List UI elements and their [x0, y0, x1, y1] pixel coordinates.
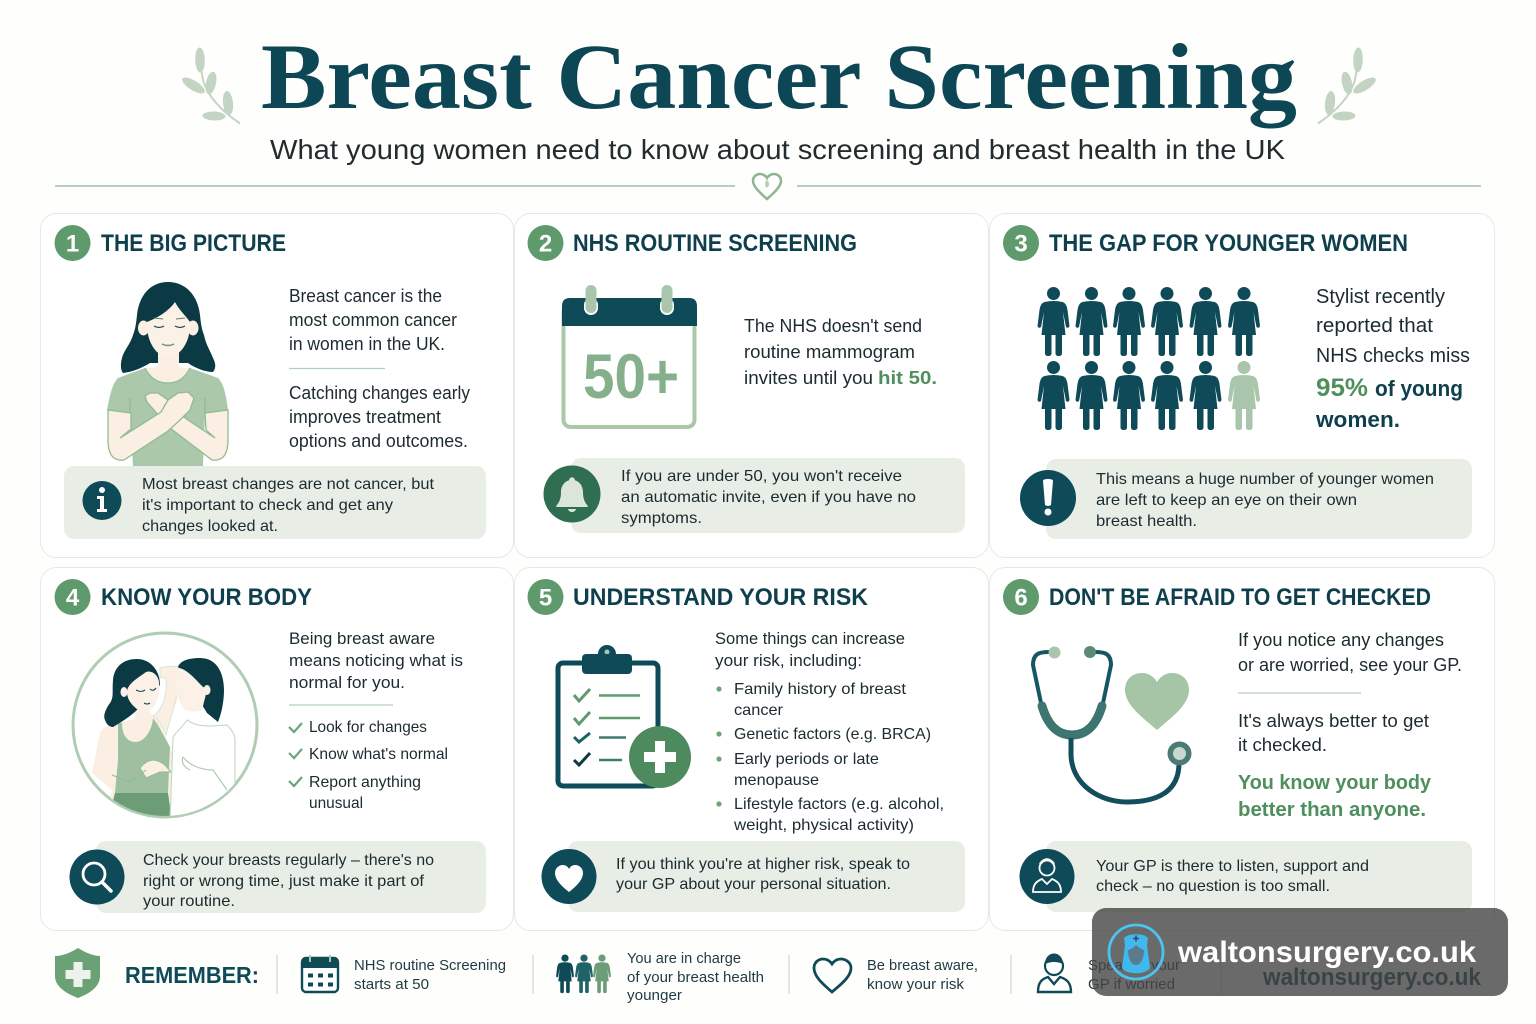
body text: most common cancer — [289, 310, 457, 330]
body text: means noticing what is — [289, 651, 463, 670]
icon: stethoscope and heart — [1033, 646, 1192, 802]
icon: three women — [556, 954, 611, 993]
callout text: your routine. — [143, 893, 235, 910]
icon: magnifier — [70, 850, 124, 904]
title: Breast Cancer Screening — [261, 26, 1297, 129]
reminder text: be aware: Be breast aware, — [867, 957, 978, 974]
callout text — [142, 476, 435, 535]
watermark text: waltonsurgery.co.uk — [1177, 936, 1476, 969]
checklist: Look for changes — [309, 719, 427, 736]
callout text — [1096, 858, 1369, 895]
callout text: your GP about your personal situation. — [616, 876, 891, 893]
checklist: unusual — [309, 795, 363, 812]
icon: shield — [55, 948, 100, 998]
icon: doctor — [1020, 849, 1074, 904]
body text: NHS checks miss — [1316, 345, 1470, 367]
body text: normal for you. — [289, 673, 405, 692]
subtitle: What young women need to know about screening and breast health in the UK — [270, 134, 1285, 165]
heading: UNDERSTAND YOUR RISK — [573, 584, 869, 611]
heading: KNOW YOUR BODY — [101, 584, 312, 611]
icon: heart outline — [814, 959, 851, 992]
number badge 2: 2 — [539, 230, 552, 258]
callout text: Most breast changes are not cancer, but — [142, 476, 435, 493]
body text — [1315, 286, 1470, 432]
number badge 5: 5 — [539, 584, 552, 612]
callout text: changes looked at. — [142, 518, 278, 535]
callout — [544, 458, 965, 533]
body text: routine mammogram — [744, 342, 915, 362]
reminder text: be aware: know your risk — [867, 976, 965, 993]
website: waltonsurgery.co.uk — [1262, 964, 1482, 991]
risk factors text: Lifestyle factors (e.g. alcohol, — [734, 796, 944, 813]
callout text: Check your breasts regularly – there's no — [143, 852, 434, 869]
body text — [289, 286, 470, 451]
icon: heart — [542, 849, 596, 904]
body text: The NHS doesn't send — [744, 316, 922, 336]
reminder text: in charge: You are in charge — [627, 950, 741, 967]
risk factors text: your risk, including: — [715, 652, 862, 670]
body text: options and outcomes. — [289, 431, 468, 451]
panel: know your body — [40, 568, 514, 930]
body text: invites until you — [744, 368, 873, 388]
pictogram: 11 of 12 women — [1038, 287, 1260, 430]
checklist: Know what's normal — [309, 746, 448, 763]
body text — [1238, 630, 1462, 821]
body text: 95% — [1316, 374, 1368, 402]
callout — [1020, 459, 1472, 539]
icon: small calendar — [302, 955, 338, 992]
number badge 6: 6 — [1014, 584, 1028, 612]
number badge 4 — [54, 579, 90, 615]
callout text: breast health. — [1096, 513, 1197, 530]
callout text: an automatic invite, even if you have no — [621, 489, 916, 506]
reminder text: GP: Speak to your — [1088, 957, 1180, 974]
checklist — [289, 719, 448, 812]
panel: the big picture — [40, 214, 514, 558]
body text: Breast cancer is the — [289, 286, 442, 306]
reminder text: NHS: NHS routine Screening — [354, 957, 506, 974]
risk factors text: Family history of breast — [734, 681, 907, 698]
icon: info — [82, 481, 122, 520]
number badge 3 — [1003, 225, 1039, 261]
callout — [1020, 841, 1472, 912]
icon: clipboard with plus — [558, 645, 691, 788]
reminder text: in charge: of your breast health — [627, 969, 764, 986]
reminder text: GP — [1088, 957, 1180, 993]
watermark overlay — [1092, 908, 1508, 996]
body text — [289, 629, 463, 705]
number badge 1: 1 — [66, 230, 79, 258]
body text: If you notice any changes — [1238, 630, 1444, 650]
callout — [64, 466, 486, 539]
body text: Stylist recently — [1316, 286, 1445, 308]
callout text: This means a huge number of younger women — [1096, 471, 1434, 488]
body text: in women in the UK. — [289, 334, 445, 354]
panel: don't be afraid to get checked — [990, 568, 1494, 930]
heading: THE BIG PICTURE — [101, 230, 286, 257]
reminder text: in charge — [627, 950, 764, 1004]
body text: or are worried, see your GP. — [1238, 655, 1462, 675]
reminder text: NHS: starts at 50 — [354, 976, 429, 993]
panel: NHS routine screening — [514, 214, 988, 558]
icon: exclamation — [1020, 470, 1076, 526]
callout — [70, 841, 486, 913]
remember strip — [55, 948, 1482, 1004]
heading: THE GAP FOR YOUNGER WOMEN — [1049, 230, 1408, 257]
illustration: woman with crossed hands — [107, 282, 228, 466]
number badge 6 — [1003, 579, 1039, 615]
icon: nurse logo — [1109, 925, 1163, 979]
callout text: it's important to check and get any — [142, 497, 393, 514]
number badge 1 — [54, 225, 90, 261]
icon: calendar 50+ — [562, 285, 697, 427]
callout text: are left to keep an eye on their own — [1096, 492, 1357, 509]
risk factors text: weight, physical activity) — [733, 817, 914, 834]
remember label: REMEMBER: — [125, 962, 259, 988]
callout text: symptoms. — [621, 510, 702, 527]
body text: Catching changes early — [289, 383, 470, 403]
panel: the gap for younger women — [990, 214, 1494, 558]
callout text — [616, 856, 910, 893]
reminder text: GP: GP if worried — [1088, 976, 1175, 993]
checklist: Report anything — [309, 774, 421, 791]
icon: left laurel — [180, 47, 240, 124]
callout text: If you are under 50, you won't receive — [621, 468, 902, 485]
illustration: two women in circle — [73, 633, 257, 820]
callout text — [621, 468, 916, 527]
risk factors text: cancer — [734, 702, 784, 719]
body text: improves treatment — [289, 407, 441, 427]
risk factors text: Some things can increase — [715, 630, 905, 648]
body text: You know your body — [1238, 772, 1432, 794]
icon: calendar 50+: 50+ — [583, 342, 679, 412]
body text: better than anyone. — [1238, 799, 1426, 821]
reminder text: NHS — [354, 957, 506, 993]
callout text — [143, 852, 434, 910]
body text: women. — [1315, 407, 1400, 432]
risk factors text — [715, 630, 944, 834]
body text: of young — [1375, 376, 1463, 401]
callout text: check – no question is too small. — [1096, 878, 1330, 895]
reminder text: in charge: younger — [627, 987, 682, 1004]
number badge 3: 3 — [1014, 230, 1028, 258]
heading: DON'T BE AFRAID TO GET CHECKED — [1049, 584, 1431, 611]
callout text: If you think you're at higher risk, speak to — [616, 856, 910, 873]
reminder text: be aware — [867, 957, 978, 993]
header divider with heart — [55, 174, 1481, 199]
callout text: Your GP is there to listen, support and — [1096, 858, 1369, 875]
body text: hit 50. — [878, 368, 937, 388]
body text: it checked. — [1238, 735, 1327, 755]
body text — [744, 316, 937, 388]
callout text: right or wrong time, just make it part of — [143, 873, 425, 890]
number badge 4: 4 — [66, 584, 80, 612]
risk factors text: Genetic factors (e.g. BRCA) — [734, 726, 931, 743]
callout text — [1096, 471, 1434, 530]
icon: bell — [544, 466, 600, 522]
body text: Being breast aware — [289, 629, 435, 648]
callout — [542, 841, 965, 912]
icon: right laurel — [1318, 47, 1378, 124]
panel: understand your risk — [514, 568, 988, 930]
icon: doctor outline — [1038, 954, 1071, 992]
body text: It's always better to get — [1238, 711, 1429, 731]
risk factors text: menopause — [734, 772, 819, 789]
body text: reported that — [1316, 315, 1433, 337]
number badge 2 — [528, 225, 564, 261]
risk factors text: Early periods or late — [734, 751, 879, 768]
heading: NHS ROUTINE SCREENING — [573, 230, 857, 257]
number badge 5 — [528, 579, 564, 615]
